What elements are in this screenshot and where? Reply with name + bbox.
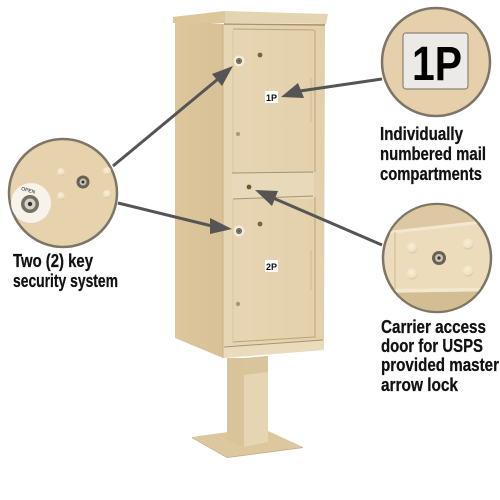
pedestal post: [227, 356, 268, 447]
callout circle: key system: [9, 139, 117, 247]
caption: key system: [13, 251, 118, 291]
arrow: compartment number: [281, 79, 382, 98]
cabinet side panel: [175, 20, 223, 358]
arrow: carrier door: [255, 190, 382, 245]
open lock plate: OPEN: [20, 186, 36, 196]
pedestal base plate: [192, 431, 303, 458]
caption: numbered compartments: Individually: [380, 124, 463, 144]
caption: key system: security system: [13, 271, 118, 291]
caption: carrier access: [381, 317, 499, 395]
lower door 2P: [224, 197, 323, 347]
label 1P: 1P: [266, 93, 278, 104]
caption: carrier access: arrow lock: [381, 375, 459, 395]
cabinet front: [223, 24, 325, 358]
upper door 1P: [233, 29, 315, 172]
arrow: key lock lower: [118, 203, 232, 234]
cabinet top cap: [173, 11, 328, 25]
arrow: key lock upper: [113, 66, 233, 166]
label 2P: 2P: [266, 262, 278, 273]
mailbox unit: [173, 11, 328, 458]
callout circle: 1P number: 1P: [412, 38, 462, 91]
caption: key system: Two (2) key: [13, 251, 93, 271]
callout circle: carrier lock: [382, 202, 492, 314]
carrier access door: [232, 172, 314, 199]
caption: numbered compartments: [380, 124, 486, 184]
callout circle: 1P number: [382, 8, 490, 116]
